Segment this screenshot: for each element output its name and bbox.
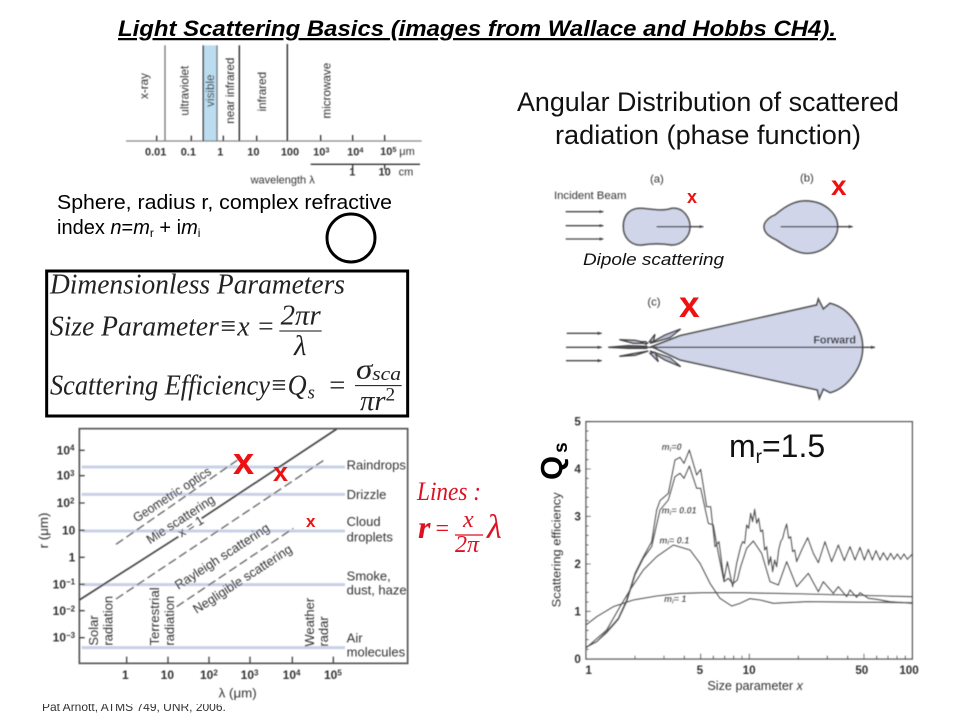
chart: scattering regimes r versus wavelength: droplets (347, 529, 393, 544)
diagram: phase function lobes: Incident Beam (554, 190, 626, 202)
label: dipole scattering: Dipole scattering (583, 250, 725, 269)
curve mi=0.1 (586, 545, 912, 648)
chart: scattering regimes r versus wavelength: 10 (53, 631, 66, 645)
label: Qs axis: Q (534, 456, 569, 480)
chart: scattering regimes r versus wavelength: r (μm) (36, 513, 51, 548)
chart: scattering regimes r versus wavelength: dust, haze (347, 583, 407, 598)
red x markers on regime chart: x (233, 441, 254, 483)
label: mr=1.5: r (756, 447, 763, 468)
chart: scattering regimes r versus wavelength: 4 (70, 444, 75, 453)
chart: scattering regimes r versus wavelength: 3 (70, 469, 75, 478)
red x markers on lobes (679, 170, 847, 325)
chart: scattering efficiency vs size parameter: Scattering efficiency (550, 492, 564, 607)
chart: scattering efficiency vs size parameter: =0 (671, 442, 682, 452)
text: sphere description: + i (154, 217, 181, 239)
diagram: phase function lobes: (a) (650, 173, 664, 185)
panel: dimensionless parameters equations: 2πr (281, 299, 322, 331)
chart: electromagnetic spectrum: 4 (359, 146, 364, 155)
chart: scattering regimes r versus wavelength: −3 (66, 631, 76, 640)
chart: scattering efficiency vs size parameter: 100 (899, 664, 919, 677)
lobe a (623, 208, 690, 245)
chart: electromagnetic spectrum: 10 (379, 166, 391, 178)
chart: scattering regimes r versus wavelength: Smoke, (347, 569, 391, 584)
chart: scattering efficiency vs size parameter: = 0.01 (671, 506, 697, 516)
chart: scattering regimes r versus wavelength: Raindrops (347, 458, 406, 473)
lobe b (764, 201, 838, 253)
chart: scattering regimes r versus wavelength: x = 1 (175, 513, 206, 540)
chart: scattering regimes r versus wavelength: 10 (57, 469, 70, 483)
chart: scattering efficiency vs size parameter: 5 (697, 664, 704, 677)
panel: dimensionless parameters equations: σ (356, 353, 370, 385)
text: sphere description: m (181, 217, 198, 239)
chart: scattering regimes r versus wavelength: Drizzle (347, 487, 386, 502)
chart: scattering regimes r versus wavelength: molecules (347, 645, 406, 660)
chart: electromagnetic spectrum: μm (399, 146, 415, 158)
red formula: lines: λ (486, 509, 502, 546)
chart: scattering efficiency vs size parameter: 1 (585, 664, 592, 677)
title: Light Scattering Basics (images from Wallace and Hobbs CH4). (118, 16, 836, 41)
chart: scattering regimes r versus wavelength: 5 (337, 668, 342, 677)
red x markers on lobes: x (831, 170, 847, 201)
red x markers on regime chart: x (273, 457, 288, 487)
red formula: lines: 2π (455, 532, 480, 558)
label: mr=1.5: m (729, 428, 756, 464)
chart: electromagnetic spectrum: 3 (325, 146, 329, 155)
chart: scattering efficiency vs size parameter: i (670, 447, 672, 453)
panel: dimensionless parameters equations: λ (293, 330, 306, 362)
chart: scattering regimes r versus wavelength: 10 (283, 668, 296, 682)
chart: scattering regimes r versus wavelength: Air (347, 630, 363, 645)
red x markers on regime chart: x (306, 512, 316, 531)
chart: scattering regimes r versus wavelength: 1 (122, 668, 129, 682)
chart: scattering regimes r versus wavelength: 2 (213, 668, 218, 677)
chart: scattering efficiency vs size parameter: m (662, 442, 670, 452)
chart: electromagnetic spectrum: cm (399, 166, 413, 178)
chart: scattering regimes r versus wavelength: Geometric optics (130, 463, 214, 525)
diagram: phase function lobes: Forward (813, 334, 856, 346)
chart: scattering efficiency vs size parameter: 50 (855, 664, 868, 677)
curve mi=0.01 (586, 466, 912, 647)
chart: scattering efficiency vs size parameter: m (664, 594, 672, 604)
chart: electromagnetic spectrum: infrared (256, 72, 269, 111)
diagram: phase function lobes: (c) (647, 297, 661, 309)
label: Qs axis: s (551, 442, 572, 453)
panel: dimensionless parameters equations: Size Parameter≡x = (50, 311, 275, 343)
panel: dimensionless parameters equations: s (308, 382, 315, 403)
chart: electromagnetic spectrum: wavelength λ (250, 175, 315, 187)
panel: dimensionless parameters equations: 2 (386, 385, 395, 406)
red x markers on regime chart (233, 441, 316, 531)
chart: scattering regimes r versus wavelength: 3 (254, 668, 259, 677)
chart: electromagnetic spectrum: ultraviolet (178, 65, 191, 116)
red formula: lines: x (462, 507, 474, 533)
text: sphere description: Sphere, radius r, complex refractive (57, 192, 392, 214)
chart: scattering regimes r versus wavelength: λ (μm) (219, 685, 257, 700)
chart: scattering efficiency vs size parameter: i (670, 511, 672, 517)
chart: scattering regimes r versus wavelength: Cloud (347, 514, 381, 529)
chart: electromagnetic spectrum: 10 (380, 146, 392, 158)
diagram: phase function lobes (554, 173, 875, 398)
chart: electromagnetic spectrum: 0.01 (145, 147, 166, 159)
chart: scattering regimes r versus wavelength: Rayleigh scattering (172, 520, 272, 593)
chart: scattering regimes r versus wavelength: 10 (62, 523, 76, 537)
chart: scattering efficiency vs size parameter (550, 416, 919, 693)
chart: electromagnetic spectrum: 1 (217, 147, 223, 159)
chart: scattering efficiency vs size parameter: m (659, 535, 667, 545)
panel: dimensionless parameters equations: = (327, 369, 347, 401)
text: sphere description: i (198, 226, 200, 240)
chart: electromagnetic spectrum: 10 (247, 147, 259, 159)
chart: electromagnetic spectrum (126, 44, 422, 187)
text: sphere description: index n=m (57, 217, 150, 239)
chart: scattering regimes r versus wavelength: Negligible scattering (190, 541, 295, 617)
chart: scattering regimes r versus wavelength: 10 (53, 604, 66, 618)
panel: dimensionless parameters equations (47, 268, 408, 417)
lobe c (652, 299, 863, 398)
chart: scattering regimes r versus wavelength: Terrestrial (147, 587, 162, 646)
text: sphere description: r (150, 226, 154, 240)
chart: scattering efficiency vs size parameter: m (662, 506, 670, 516)
chart: electromagnetic spectrum: near infrared (224, 58, 237, 124)
chart: scattering efficiency vs size parameter: 1 (574, 605, 581, 618)
chart: scattering efficiency vs size parameter: 3 (574, 511, 581, 524)
chart: scattering regimes r versus wavelength: 2 (70, 496, 75, 505)
heading: angular distribution: Angular Distribution of scattered (517, 87, 899, 117)
curve mi=1 (586, 593, 912, 625)
red x markers on lobes: x (679, 284, 700, 325)
diagram: phase function lobes: (b) (800, 173, 814, 185)
chart: scattering regimes r versus wavelength: 10 (200, 668, 213, 682)
chart: scattering regimes r versus wavelength: 10 (57, 496, 70, 510)
curve mi=0 (586, 450, 912, 647)
chart: scattering regimes r versus wavelength: 10 (161, 668, 174, 682)
chart: scattering regimes r versus wavelength: 1 (69, 550, 76, 564)
chart: scattering regimes r versus wavelength: −2 (66, 604, 76, 613)
red x markers on lobes: x (687, 187, 697, 207)
chart: scattering regimes r versus wavelength: radiation (162, 596, 177, 646)
chart: scattering regimes r versus wavelength: 10 (57, 443, 70, 457)
mask: plot image top edge over credit (36, 420, 412, 704)
footer credit: Pat Arnott, ATMS 749, UNR, 2006. (42, 700, 226, 714)
chart: scattering efficiency vs size parameter: Size parameter x (707, 679, 804, 693)
chart: electromagnetic spectrum: visible (204, 74, 217, 107)
label: mr=1.5: =1.5 (762, 428, 825, 464)
panel: dimensionless parameters equations: Scattering Efficiency≡Q (50, 369, 307, 401)
chart: scattering efficiency vs size parameter: 2 (574, 558, 581, 571)
chart: scattering efficiency vs size parameter: 4 (574, 463, 581, 476)
panel: dimensionless parameters equations: πr (360, 385, 386, 417)
chart: scattering efficiency vs size parameter: i (667, 541, 669, 547)
heading: angular distribution: radiation (phase function) (555, 120, 861, 150)
chart: electromagnetic spectrum: 10 (313, 147, 325, 159)
chart: scattering regimes r versus wavelength: Weather (302, 597, 317, 647)
bands (82, 467, 345, 648)
chart: scattering regimes r versus wavelength: 10 (53, 577, 66, 591)
chart: scattering regimes r versus wavelength: radiation (100, 596, 115, 646)
panel: dimensionless parameters equations: Dimensionless Parameters (49, 268, 345, 300)
chart: electromagnetic spectrum: 100 (281, 147, 299, 159)
red formula: lines: Lines : (416, 477, 481, 506)
chart: scattering regimes r versus wavelength: radar (316, 616, 331, 647)
chart: scattering efficiency vs size parameter: 5 (574, 416, 581, 429)
chart: scattering regimes r versus wavelength: 10 (241, 668, 254, 682)
chart: scattering efficiency vs size parameter: 0 (574, 653, 581, 666)
heading: angular distribution (517, 87, 899, 150)
chart: scattering regimes r versus wavelength (36, 429, 408, 700)
chart: scattering regimes r versus wavelength: −1 (66, 578, 76, 587)
chart: scattering regimes r versus wavelength: 10 (324, 668, 337, 682)
chart: electromagnetic spectrum: 5 (392, 145, 396, 154)
chart: scattering efficiency vs size parameter: 10 (743, 664, 756, 677)
chart: scattering regimes r versus wavelength: 4 (296, 668, 301, 677)
chart: electromagnetic spectrum: 1 (349, 166, 355, 178)
chart: electromagnetic spectrum: microwave (321, 63, 334, 119)
red formula: lines: r (418, 509, 431, 545)
chart: electromagnetic spectrum: 10 (347, 147, 359, 159)
red formula: lines (416, 477, 502, 558)
chart: electromagnetic spectrum: x-ray (138, 73, 151, 99)
icon: sphere circle (327, 214, 375, 262)
chart: scattering efficiency vs size parameter: i (672, 599, 674, 605)
chart: scattering efficiency vs size parameter: = 1 (674, 594, 686, 604)
chart: electromagnetic spectrum: 0.1 (181, 147, 196, 159)
red formula: lines: = (434, 516, 450, 542)
panel: dimensionless parameters equations: sca (372, 364, 401, 385)
chart: scattering regimes r versus wavelength: Solar (86, 615, 101, 646)
text: sphere description (57, 192, 392, 240)
chart: scattering efficiency vs size parameter: = 0.1 (669, 535, 689, 545)
chart: scattering regimes r versus wavelength: Mie scattering (143, 492, 217, 547)
